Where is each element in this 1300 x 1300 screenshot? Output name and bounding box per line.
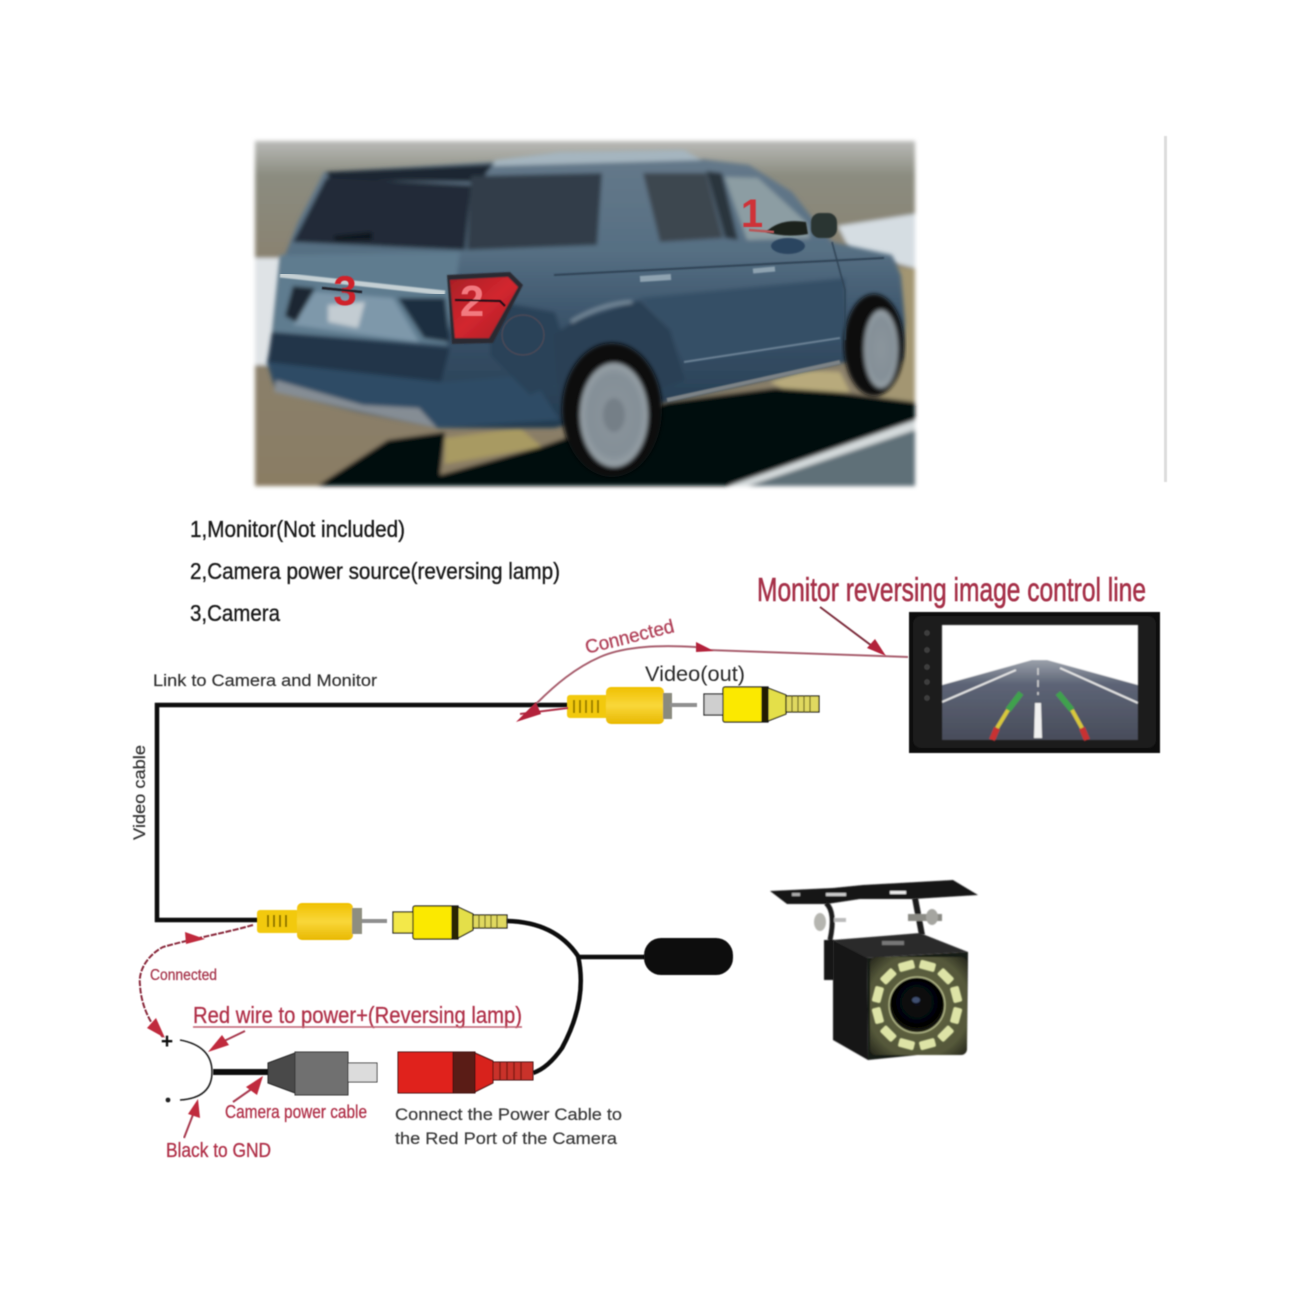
label: link to camera and monitor: Link to Camera and Monitor [153, 671, 377, 690]
monitor [909, 612, 1160, 753]
rear wheel [562, 343, 662, 477]
arrow: camera power cable [233, 1076, 263, 1102]
label: connect power cable note [395, 1105, 622, 1148]
label: connect power cable note: Connect the Power Cable to [395, 1105, 622, 1124]
yellow RCA female plug, bottom [257, 903, 387, 940]
photo background landscape [255, 141, 915, 486]
front wheel [844, 294, 904, 396]
yellow RCA female plug, top [567, 687, 697, 724]
inline module on cable [644, 938, 733, 975]
reversing camera [770, 880, 978, 1060]
camera housing [833, 933, 968, 1060]
legend item 1: 1,Monitor(Not included) [190, 516, 405, 542]
label: red wire to power: Red wire to power+(Reversing lamp) [193, 1002, 522, 1028]
body trim lines [554, 242, 884, 400]
marker 1: monitor [741, 192, 774, 236]
marker 2: power source: 2 [460, 277, 484, 326]
cable: camera to plugs [507, 921, 645, 1073]
tail light [447, 272, 523, 344]
arrow: connected curve, top [516, 642, 908, 722]
marker 2: power source [455, 277, 505, 326]
arrow: connected curve, bottom [140, 925, 253, 1038]
power terminal fork [161, 1030, 212, 1102]
monitor buttons [924, 630, 930, 701]
camera lens [889, 977, 945, 1033]
yellow RCA male plug, bottom [393, 906, 507, 939]
legend item 3: 3,Camera [190, 600, 280, 626]
monitor screen: road with parking guides [942, 625, 1138, 740]
label: black to GND: Black to GND [166, 1140, 271, 1162]
label: video out: Video(out) [645, 663, 745, 686]
label: connect power cable note: the Red Port of the Camera [395, 1129, 618, 1148]
marker 3: camera: 3 [333, 267, 357, 314]
legend item 2: 2,Camera power source(reversing lamp) [190, 558, 560, 584]
fuel cap [502, 315, 544, 355]
photo: SUV with numbered install locations [255, 141, 915, 486]
video cable wiring [157, 705, 570, 920]
marker 1: monitor: 1 [741, 192, 763, 236]
chrome tailgate bar [280, 275, 445, 293]
label: connected, top: Connected [583, 616, 677, 659]
camera brackets and screws [814, 898, 942, 980]
cable: module to camera [733, 955, 825, 959]
arrow: red wire [208, 1031, 245, 1052]
label: connected, bottom: Connected [150, 967, 217, 984]
power terminal fork: + [161, 1030, 173, 1053]
red power plug [398, 1052, 533, 1093]
camera LED ring [871, 959, 963, 1051]
arrow: control line pointer [820, 607, 886, 656]
label: camera power cable: Camera power cable [225, 1102, 367, 1122]
side mirror [766, 213, 837, 254]
camera mounting plate [770, 880, 978, 904]
cable: plug to monitor [815, 703, 912, 707]
yellow RCA male plug, top [704, 687, 819, 722]
marker 3: camera [322, 267, 362, 314]
legend list [190, 516, 560, 626]
grey power plug with wire [213, 1052, 377, 1095]
heading: monitor control line: Monitor reversing image control line [757, 571, 1146, 608]
monitor inner frame [913, 616, 1156, 748]
arrow: black to GND [184, 1099, 200, 1138]
vertical divider artifact [1164, 136, 1167, 482]
monitor bezel [909, 612, 1160, 753]
SUV body [267, 150, 905, 428]
label: video cable: Video cable [130, 745, 149, 840]
